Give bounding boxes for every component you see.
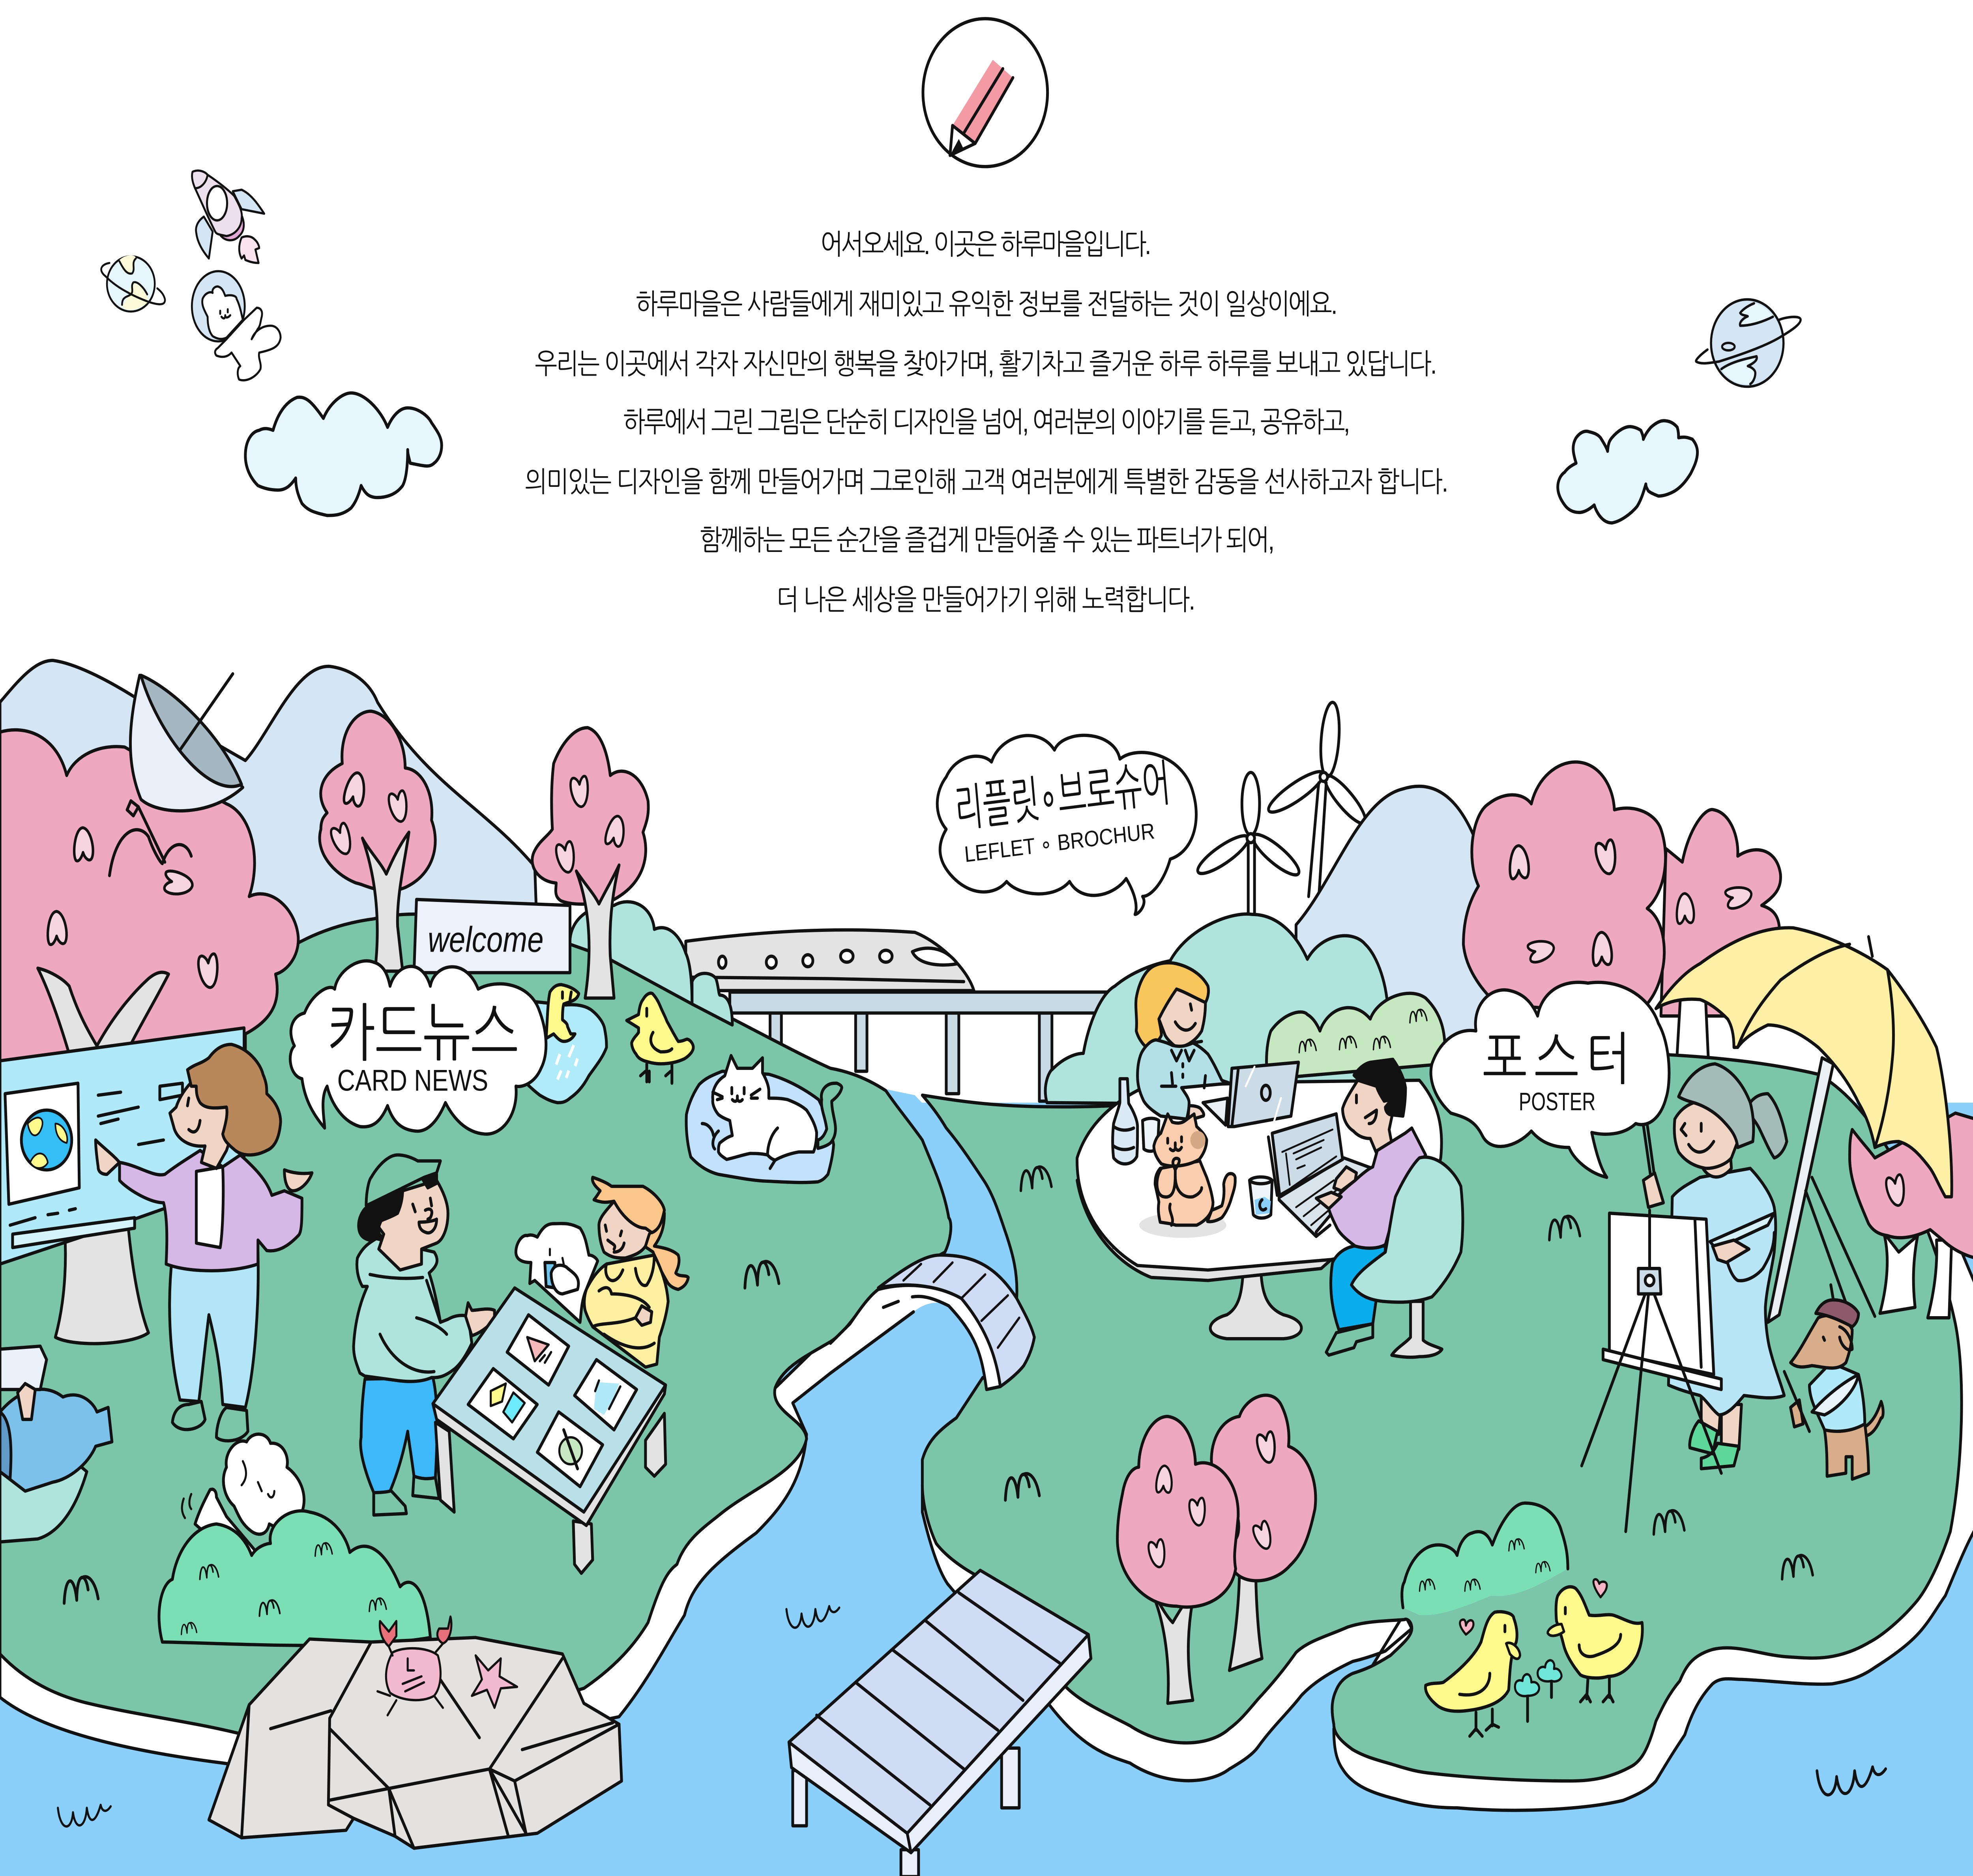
open laptop blonde lid [1228, 1062, 1299, 1126]
presentation board [0, 1028, 244, 1344]
tree far right [1850, 1113, 1973, 1318]
white dog near table [516, 1223, 598, 1322]
laptop base blonde [1203, 1098, 1228, 1125]
cap man [354, 1155, 494, 1515]
duck left [1425, 1612, 1520, 1736]
icon: bunny astronaut [192, 271, 281, 380]
starfish [472, 1655, 517, 1708]
river upper [881, 1089, 1022, 1322]
intro text: 더 나은 세상을 만들어가기 위해 노력합니다. [776, 584, 1195, 616]
water ripples [58, 1606, 1886, 1826]
intro text: 의미있는 디자인을 함께 만들어가며 그로인해 고객 여러분에게 특별한 감동을 선사하고자 합니다. [525, 466, 1448, 498]
bubble: leaflet brochure: LEFLET ∘ BROCHUR [963, 818, 1156, 867]
chick [627, 993, 693, 1083]
right island green [922, 1049, 1962, 1781]
pond and duck [525, 985, 607, 1103]
cat on cushion [686, 1056, 842, 1182]
heart left [1460, 1620, 1473, 1635]
bubble: leaflet brochure [937, 735, 1196, 915]
bottle and glass [1113, 1079, 1272, 1218]
pink tree back right [1661, 810, 1780, 1016]
table [1077, 1080, 1441, 1339]
green bush left [159, 1511, 431, 1646]
pink tree big right [1464, 762, 1709, 1073]
crab [378, 1617, 451, 1715]
easel rear legs [1806, 1177, 1875, 1316]
duck right [1548, 1587, 1642, 1702]
orange cat [1139, 1114, 1235, 1238]
green bush lower right [1402, 1503, 1568, 1615]
windmill small [1194, 772, 1303, 915]
dock [789, 1570, 1091, 1876]
clover [1515, 1660, 1561, 1721]
bubble: poster: 포스터 [1482, 1028, 1631, 1091]
tree small A [320, 711, 435, 971]
intro text: 함께하는 모든 순간을 즐겁게 만들어줄 수 있는 파트너가 되어, [700, 525, 1275, 556]
bubble: card news [290, 961, 546, 1134]
intro text: 하루에서 그린 그림은 단순히 디자인을 넘어, 여러분의 이야기를 듣고, 공유하고, [623, 407, 1350, 438]
painter woman [1668, 1064, 1787, 1469]
trees lower [1118, 1395, 1316, 1703]
mountain right [1296, 786, 1510, 1076]
top pencil badge [923, 19, 1048, 166]
mint bushes behind table [1045, 914, 1388, 1105]
grass tufts [64, 1167, 1813, 1603]
right island shore [922, 1165, 1973, 1811]
umbrella [1656, 928, 1952, 1322]
presenter woman [95, 1044, 312, 1441]
stone arch bridge [831, 1255, 1034, 1390]
light green bush [1267, 993, 1445, 1079]
dog peeking from bush [182, 1434, 308, 1569]
intro text [525, 229, 1448, 616]
welcome sign [414, 900, 570, 973]
bubble: poster [1431, 982, 1669, 1177]
man's laptop [1268, 1114, 1370, 1236]
mountain left [0, 660, 541, 1046]
left island green [0, 914, 951, 1748]
chair [1352, 1157, 1463, 1357]
glass behind cat [1142, 1118, 1159, 1151]
windmill large [1265, 701, 1370, 900]
lying person with tablet [0, 1346, 112, 1542]
bubble: card news: 카드뉴스 [327, 999, 519, 1068]
heart right [1593, 1579, 1607, 1597]
water [0, 1103, 1973, 1876]
working man [1316, 1059, 1426, 1355]
dog painter [1784, 1285, 1883, 1479]
bubble: poster: POSTER [1519, 1087, 1595, 1116]
small mint bush beside bridge [692, 973, 732, 1025]
icon: cloud right [1558, 421, 1698, 523]
train on bridge [686, 930, 1120, 1101]
intro text: 우리는 이곳에서 각자 자신만의 행복을 찾아가며, 활기차고 즐거운 하루 하루를 보내고 있답니다. [535, 348, 1437, 380]
poster table [433, 1288, 666, 1573]
satellite dish [127, 674, 243, 862]
rocks [209, 1638, 621, 1848]
bubble: card news: CARD NEWS [337, 1064, 488, 1097]
left island shore [0, 1285, 913, 1778]
tree small B [532, 728, 648, 998]
icon: cloud left [245, 393, 442, 516]
icon: planet left [101, 255, 165, 312]
icon: rocket [192, 170, 264, 263]
welcome sign: welcome [428, 919, 544, 960]
intro text: 어서오세요. 이곳은 하루마을입니다. [820, 229, 1151, 260]
big pink tree left [0, 730, 298, 1135]
mint bush near hill [570, 902, 692, 1004]
icon: saturn [1696, 299, 1801, 387]
blonde woman [1136, 963, 1229, 1120]
bubble: leaflet brochure: 리플릿∘브로슈어 [953, 755, 1172, 837]
intro text: 하루마을은 사람들에게 재미있고 유익한 정보를 전달하는 것이 일상이에요. [635, 288, 1338, 320]
yellow shirt woman [584, 1177, 688, 1367]
canvas easel [1582, 1124, 1721, 1532]
